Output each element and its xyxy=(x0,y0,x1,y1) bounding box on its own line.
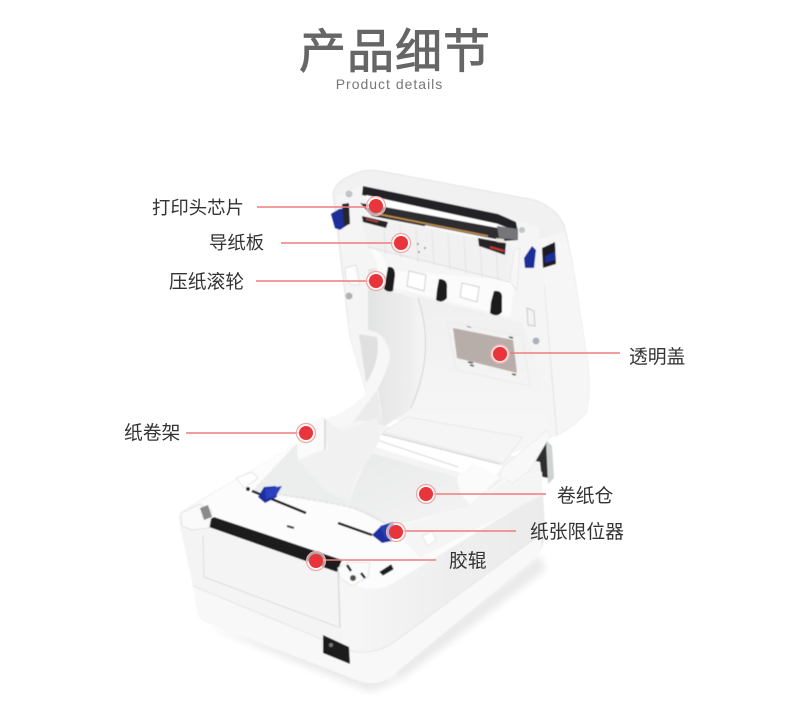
guide slots xyxy=(252,491,306,513)
head end cap xyxy=(497,226,518,240)
callout: print head chip: 打印头芯片 xyxy=(152,197,244,218)
blue paper guide right xyxy=(372,526,392,543)
small parts xyxy=(246,487,250,491)
dots on plate xyxy=(417,243,419,245)
transparent window xyxy=(453,328,517,373)
ground shadow xyxy=(205,555,545,692)
blue paper guide left xyxy=(258,486,277,503)
bottom band xyxy=(193,535,542,683)
callout: transparent cover: 透明盖 xyxy=(629,346,685,367)
print head lower bar xyxy=(360,203,518,241)
lid inner frame xyxy=(336,186,556,470)
black platen roller xyxy=(206,517,342,572)
callout: pressure roller: 压纸滚轮 xyxy=(169,271,244,292)
red labels xyxy=(362,216,388,228)
right hinge block xyxy=(338,562,370,586)
hinge gap right of base xyxy=(528,440,549,478)
deck serrated ridge xyxy=(253,491,392,528)
white tabs xyxy=(407,271,426,291)
base right face xyxy=(340,492,545,683)
blue hinge right xyxy=(524,246,536,268)
subtitle: Product details xyxy=(336,76,443,92)
left side screw holes and slot xyxy=(346,190,352,198)
curve edge xyxy=(411,298,426,408)
deck white in front of bay right xyxy=(392,472,542,558)
base top deck xyxy=(186,443,543,589)
callout: print head chip xyxy=(152,196,386,218)
lid inner rim line xyxy=(544,284,557,436)
orange heating strip xyxy=(378,214,488,236)
paper holder right xyxy=(457,463,500,505)
curved inner side xyxy=(368,268,426,427)
lid shell xyxy=(333,170,589,470)
callout: paper compartment: 卷纸仓 xyxy=(557,485,614,506)
paper guide plate xyxy=(360,216,512,282)
callout: paper limiter: 纸张限位器 xyxy=(530,521,624,542)
inner back wall xyxy=(388,296,549,448)
black rollers xyxy=(384,267,395,292)
paper bay xyxy=(347,453,503,527)
white strip xyxy=(425,226,500,241)
callout: paper limiter xyxy=(386,521,624,542)
callout: paper guide xyxy=(209,232,410,253)
notch gray xyxy=(359,334,378,383)
slot xyxy=(372,435,503,476)
title: 产品细节 xyxy=(299,25,491,78)
lid outer side xyxy=(537,232,589,437)
base body xyxy=(178,420,545,683)
callout: rubber roller: 胶辊 xyxy=(449,550,487,571)
print head white gap xyxy=(366,195,498,230)
paper holder left xyxy=(297,417,380,502)
printer illustration xyxy=(178,170,589,692)
blue hinge left xyxy=(331,208,349,230)
callout: paper roll holder xyxy=(124,422,316,443)
callout: paper guide: 导纸板 xyxy=(209,232,264,253)
callout: transparent cover xyxy=(490,344,685,367)
right slot xyxy=(380,565,393,575)
front door xyxy=(203,535,338,627)
left hinge block xyxy=(181,504,212,530)
callout: paper roll holder: 纸卷架 xyxy=(124,422,180,443)
window frame xyxy=(447,322,530,386)
pressing plate xyxy=(368,246,514,317)
callout: rubber roller xyxy=(306,550,487,571)
lid bottom ledge xyxy=(383,417,523,463)
callout: pressure roller xyxy=(169,271,386,292)
white arm band xyxy=(320,333,390,436)
callout: paper compartment xyxy=(416,484,614,506)
print head top bar xyxy=(362,186,518,232)
arm gray face xyxy=(346,390,383,432)
power switch xyxy=(323,635,350,664)
